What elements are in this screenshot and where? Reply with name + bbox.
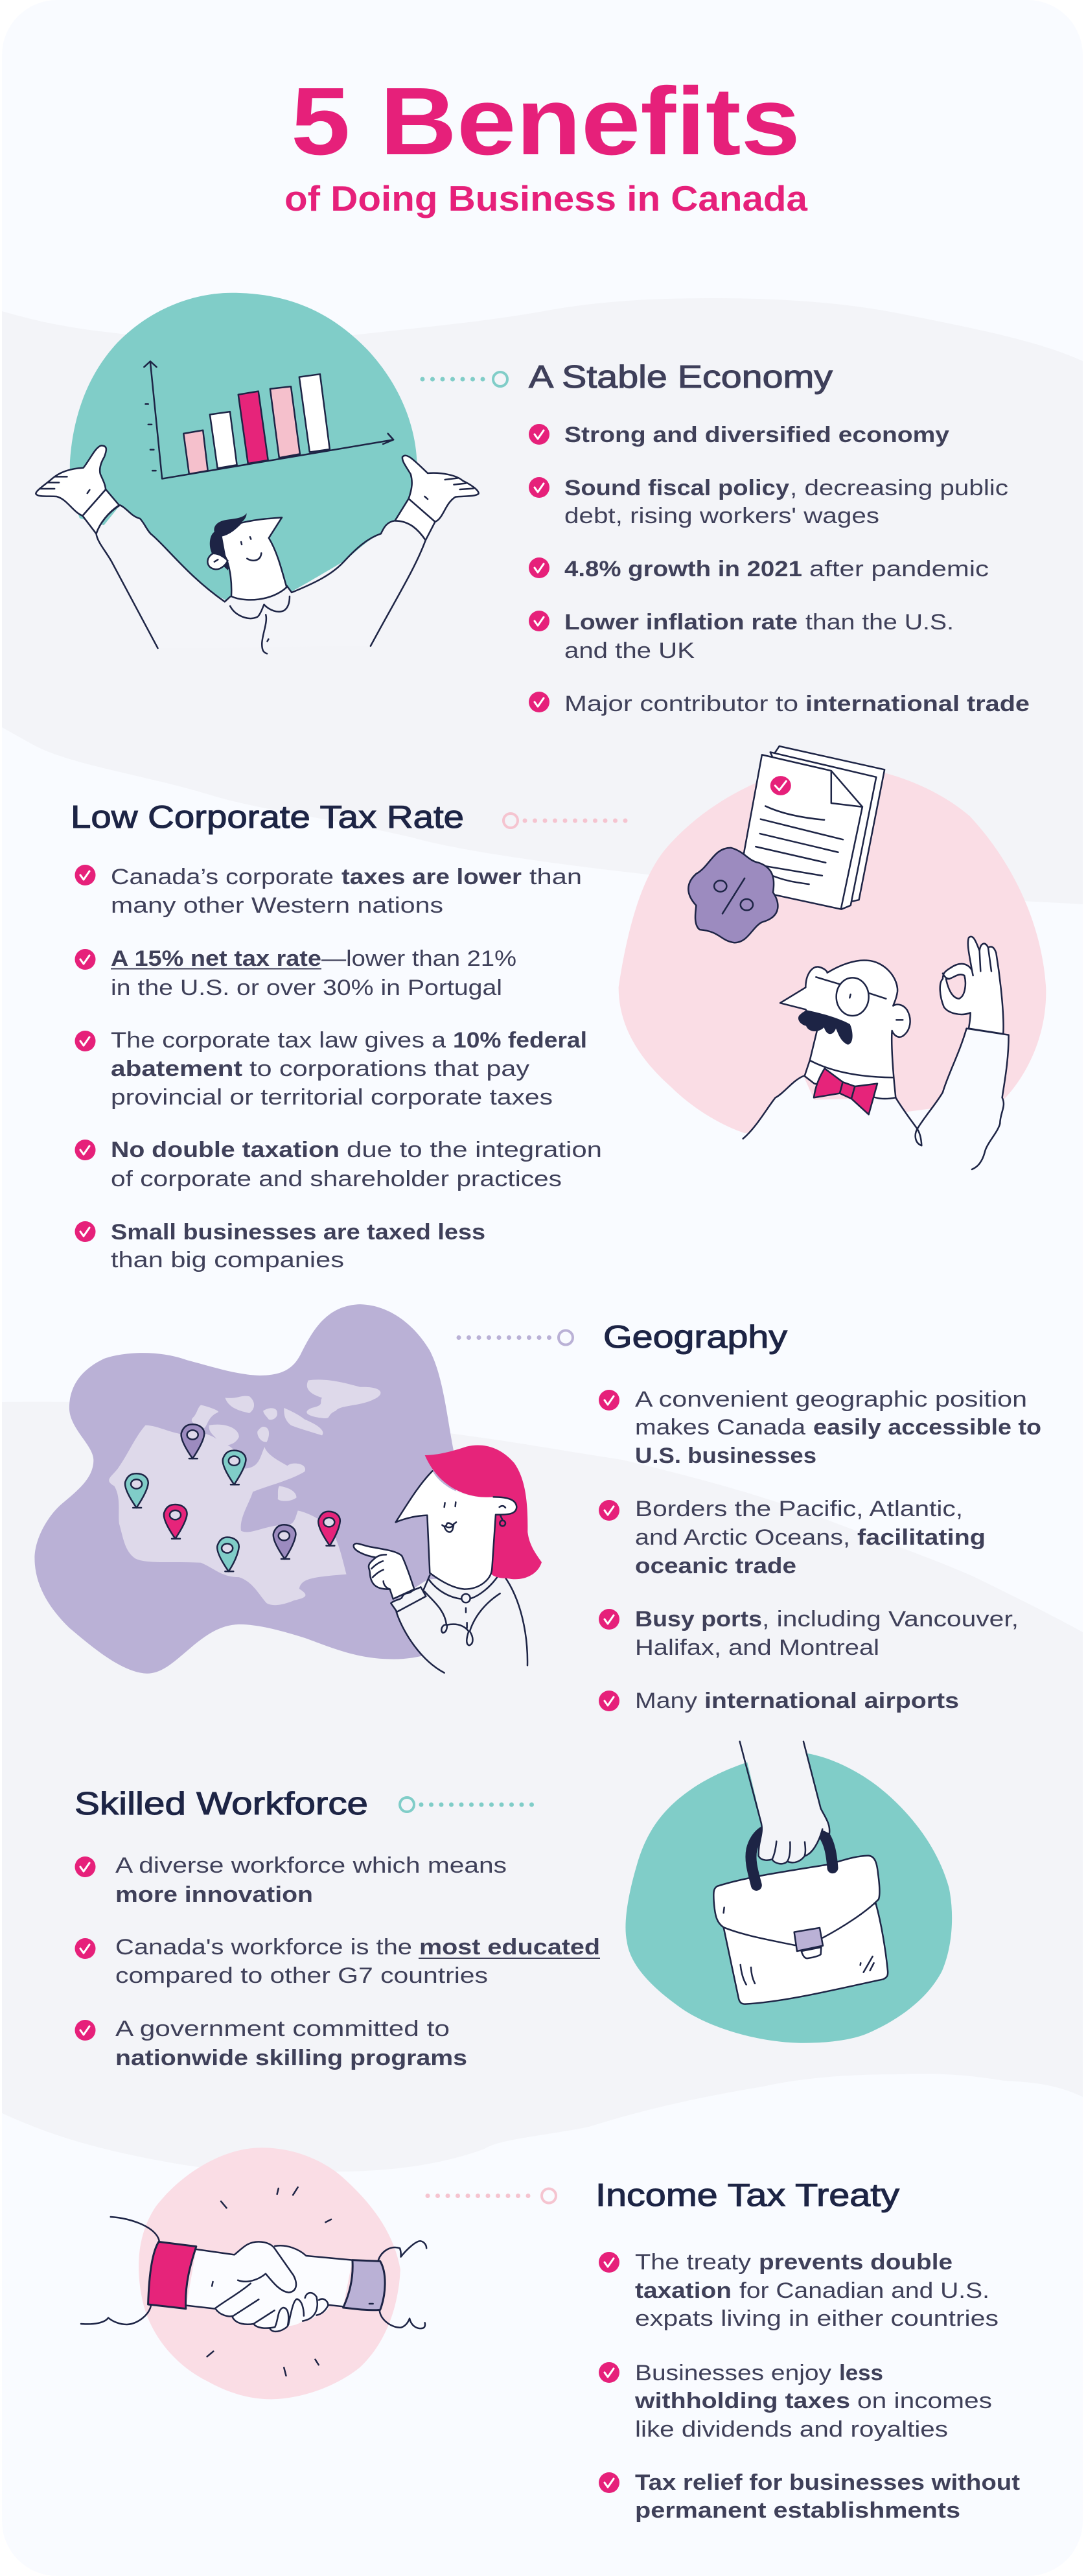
connector: income tax treaty	[428, 2188, 556, 2203]
bullet 1.3: after pandemic	[809, 557, 989, 581]
bullet 4.1: more innovation	[115, 1882, 313, 1907]
bullet 4.1	[75, 1853, 507, 1907]
bullet 2.3: to corporations that pay	[249, 1057, 529, 1081]
map pin teal	[223, 1451, 246, 1484]
map pin purple	[181, 1424, 204, 1458]
bullet 1.4	[529, 610, 954, 663]
bullet 1.2: , decreasing public	[790, 476, 1008, 500]
illustration: man with documents	[619, 746, 1046, 1169]
bullet 5.1: expats living in either countries	[635, 2306, 999, 2331]
bullet 2.2	[75, 946, 516, 1000]
bullet 1.4: than the U.S.	[805, 610, 954, 635]
bullet 5.2: less	[839, 2361, 883, 2385]
bullet 3.3	[599, 1607, 1019, 1660]
bullet 2.1: than	[529, 865, 582, 889]
bullet 5.1	[599, 2250, 999, 2331]
bullet 2.2: A 15% net tax rate	[111, 946, 321, 971]
man figure	[36, 445, 479, 653]
canada and usa map	[109, 1379, 380, 1605]
connector: skilled workforce	[400, 1797, 533, 1812]
bullet 3.2: and Arctic Oceans,	[635, 1525, 850, 1550]
bullet 2.4: of corporate and shareholder practices	[111, 1167, 562, 1191]
bullet 3.1: U.S. businesses	[635, 1444, 816, 1468]
bullet 2.1: taxes are lower	[341, 865, 522, 889]
bullet 2.5: Small businesses are taxed less	[111, 1220, 485, 1245]
bullet 5.1: for Canadian and U.S.	[739, 2278, 989, 2303]
bullet 2.3: The corporate tax law gives a	[111, 1028, 446, 1053]
bullet 3.2: facilitating	[857, 1525, 986, 1550]
bullet 1.3	[529, 557, 989, 581]
bullet 3.1: A convenient geographic position	[635, 1387, 1027, 1412]
bullet 2.4: No double taxation	[111, 1138, 340, 1162]
bullet 4.2	[75, 1935, 600, 1988]
bullet 2.4: due to the integration	[347, 1138, 602, 1162]
bullet 1.2	[529, 476, 1008, 528]
bullet 2.1: Canada’s corporate	[111, 865, 334, 889]
bullet 4.2: most educated	[419, 1935, 600, 1960]
heading: skilled workforce: Skilled Workforce	[75, 1786, 368, 1821]
woman figure	[354, 1445, 542, 1673]
connector: stable economy	[422, 372, 507, 386]
bullet 3.1	[599, 1387, 1041, 1468]
bullet 4.3: A government committed to	[115, 2017, 450, 2041]
bullet 5.3	[599, 2470, 1020, 2523]
bullet 5.2: Businesses enjoy	[635, 2361, 831, 2385]
bullet 3.1: easily accessible to	[813, 1415, 1041, 1440]
bullet 2.3: abatement	[111, 1057, 242, 1081]
bullet 3.4: Many	[635, 1689, 697, 1713]
bullet 2.3	[75, 1028, 587, 1110]
bullet 2.5: than big companies	[111, 1248, 344, 1272]
heading: a stable economy: A Stable Economy	[529, 360, 833, 395]
illustration: hand holding briefcase	[625, 1742, 952, 2043]
pink blob and spark lines	[139, 2148, 400, 2399]
bullet 1.3: 4.8% growth in 2021	[564, 557, 802, 581]
briefcase and hand	[713, 1742, 888, 2004]
bullet 5.3: Tax relief for businesses without	[635, 2470, 1020, 2495]
bullet 1.4: and the UK	[564, 638, 695, 663]
bullet 4.3	[75, 2017, 467, 2070]
teal blob	[625, 1753, 952, 2043]
bullet 2.1: many other Western nations	[111, 893, 443, 918]
map pin magenta	[318, 1512, 340, 1545]
map pin teal	[217, 1537, 239, 1571]
bullet 2.1	[75, 865, 582, 918]
bullet 2.2: in the U.S. or over 30% in Portugal	[111, 976, 502, 1000]
bullet 5.1: The treaty	[635, 2250, 751, 2275]
bullet 5.1: taxation	[635, 2278, 732, 2303]
bullet 3.4: international airports	[704, 1689, 959, 1713]
bullet 3.2	[599, 1497, 986, 1578]
connector: low corporate tax	[503, 814, 627, 828]
bullet 3.3: Busy ports	[635, 1607, 762, 1632]
bullet 2.3: 10% federal	[453, 1028, 587, 1053]
map pin teal	[125, 1473, 148, 1508]
illustration: man holding chart	[36, 293, 479, 653]
title: 5 Benefits	[291, 68, 800, 175]
bullet 5.1: prevents double	[759, 2250, 953, 2275]
clasped hands	[81, 2217, 426, 2332]
bullet 2.2: —lower than 21%	[321, 946, 516, 971]
bullet 3.2: oceanic trade	[635, 1554, 796, 1578]
teal blob and chart	[70, 293, 417, 602]
bullet 1.5	[529, 692, 1030, 716]
bullet 3.3: , including Vancouver,	[762, 1607, 1019, 1632]
bullet 5.2	[599, 2361, 992, 2442]
man with bow tie	[743, 937, 1009, 1169]
subtitle: of Doing Business in Canada	[284, 178, 807, 218]
bullet 1.5: international trade	[805, 692, 1030, 716]
connector: geography	[459, 1330, 573, 1344]
bullet 2.3: provincial or territorial corporate taxes	[111, 1085, 553, 1110]
map pin magenta	[164, 1505, 187, 1539]
illustration: handshake	[81, 2148, 426, 2399]
bullet 1.2: debt, rising workers' wages	[564, 504, 879, 528]
bullet 1.2: Sound fiscal policy	[564, 476, 789, 500]
heading: low corporate tax rate: Low Corporate Tax Rate	[71, 800, 464, 835]
bullet 4.3: nationwide skilling programs	[115, 2046, 467, 2070]
bullet 3.1: makes Canada	[635, 1415, 805, 1440]
bullet 1.5: Major contributor to	[564, 692, 798, 716]
map panel	[34, 1304, 457, 1674]
bullet 3.3: Halifax, and Montreal	[635, 1635, 879, 1660]
map pin purple	[273, 1525, 295, 1559]
bullet 1.1: Strong and diversified economy	[564, 423, 949, 447]
bullet 4.1: A diverse workforce which means	[115, 1853, 507, 1878]
title	[284, 68, 807, 218]
bullet 5.2: withholding taxes	[634, 2389, 850, 2413]
bullet 4.2: compared to other G7 countries	[115, 1963, 488, 1988]
bullet 5.2: on incomes	[857, 2389, 992, 2413]
bullet 5.3: permanent establishments	[635, 2498, 960, 2523]
bullet 3.2: Borders the Pacific, Atlantic,	[635, 1497, 963, 1521]
illustration: woman pointing at map	[34, 1304, 542, 1674]
bullet 1.4: Lower inflation rate	[564, 610, 798, 635]
bullet 5.2: like dividends and royalties	[635, 2417, 948, 2442]
purple blob	[34, 1304, 457, 1674]
pink blob, documents and badge	[619, 746, 1046, 1133]
bullet 2.4	[75, 1138, 602, 1191]
bullet 2.5	[75, 1220, 485, 1272]
bullet 4.2: Canada's workforce is the	[115, 1935, 412, 1960]
bullet 3.4	[599, 1689, 959, 1713]
heading: income tax treaty: Income Tax Treaty	[595, 2178, 900, 2213]
heading: geography: Geography	[603, 1320, 788, 1355]
